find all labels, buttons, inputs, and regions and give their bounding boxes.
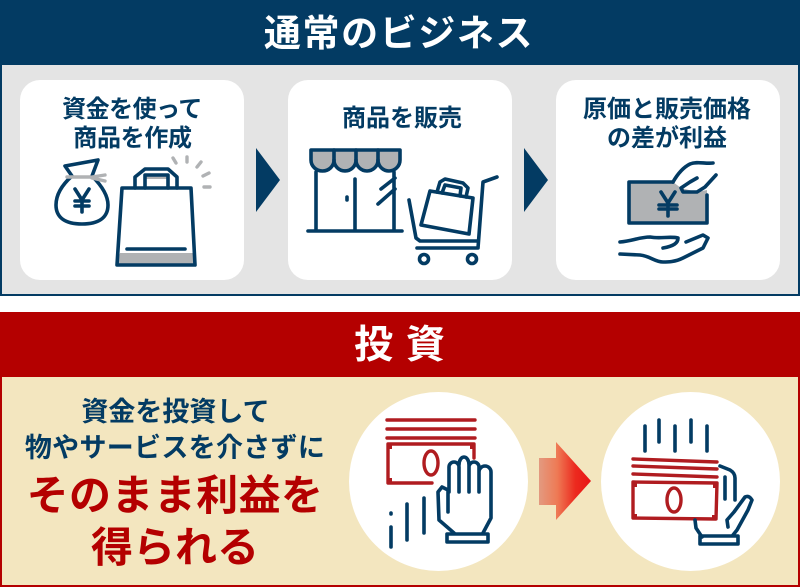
text: direct profit emphasis: そのまま利益を	[27, 472, 323, 519]
text: sell product: 商品を販売	[342, 105, 462, 132]
card: sell product	[288, 80, 512, 280]
heading bar: normal business: 通常のビジネス	[264, 13, 534, 54]
heading bar: investment	[0, 312, 800, 376]
arrow: step 2 to 3	[524, 148, 548, 212]
text: profit: 原価と販売価格	[583, 96, 751, 123]
icon: shopping bag	[117, 157, 210, 265]
icon: hands and bill	[620, 163, 716, 262]
arrow: gradient red	[539, 442, 591, 520]
icon circle: receive money	[601, 392, 780, 571]
text: invest description: 資金を投資して	[81, 397, 270, 427]
arrow: step 1 to 2	[256, 148, 280, 212]
panel: investment	[0, 312, 800, 586]
text: invest description: 物やサービスを介さずに	[25, 433, 325, 463]
text: invest description	[25, 397, 325, 463]
heading bar: normal business	[0, 0, 800, 64]
text: direct profit emphasis	[27, 472, 323, 571]
card: profit	[556, 80, 780, 280]
icon: money bag	[56, 160, 108, 224]
icon: shopping cart	[409, 177, 497, 264]
card: profit: の差が利益	[607, 124, 727, 152]
card: create product	[20, 80, 244, 280]
text: create product: 資金を使って	[62, 96, 202, 123]
text: direct profit emphasis: 得られる	[91, 524, 259, 571]
icon circle: invest money	[349, 392, 528, 571]
heading bar: investment: 投 資	[354, 324, 446, 367]
icon: store	[308, 150, 402, 231]
card: create product: 商品を作成	[73, 125, 192, 152]
panel: normal business	[0, 0, 800, 295]
